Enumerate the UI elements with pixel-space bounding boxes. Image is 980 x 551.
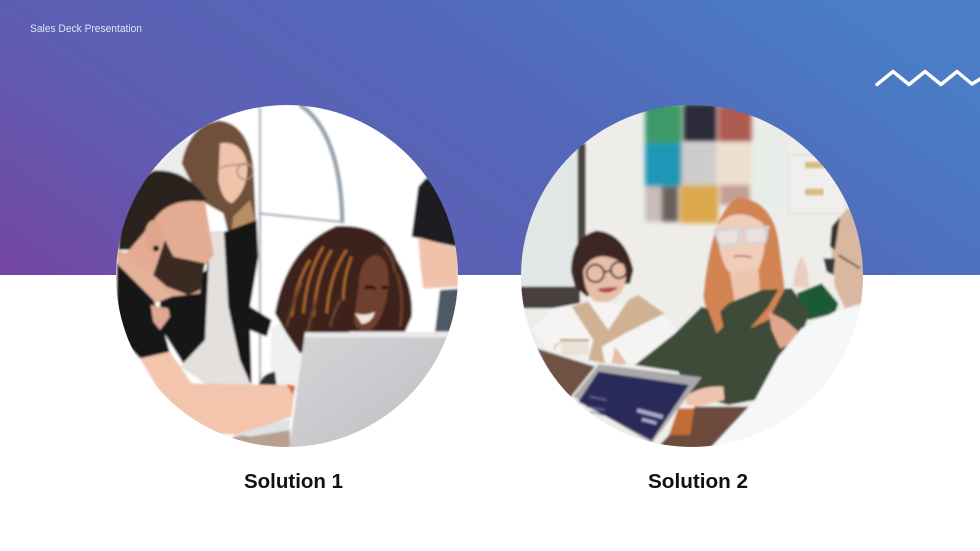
front tablet	[573, 357, 702, 443]
vase and plant	[793, 257, 838, 320]
icon: zigzag decoration	[877, 72, 980, 84]
man	[117, 171, 295, 435]
right person	[412, 177, 463, 332]
laptop	[288, 330, 448, 447]
forearm	[685, 386, 724, 407]
back laptop	[537, 348, 595, 400]
photo: colleagues at meeting table	[521, 105, 863, 447]
standing woman	[160, 121, 272, 387]
table	[659, 405, 749, 447]
poster	[645, 103, 752, 223]
heading: Solution 1: Solution 1	[244, 470, 343, 493]
terracotta pot	[669, 408, 694, 435]
deck title: Sales Deck Presentation	[30, 23, 142, 35]
window	[521, 142, 588, 310]
heading: Solution 2: Solution 2	[648, 470, 748, 493]
coffee cup	[555, 340, 589, 355]
curly hair woman	[258, 226, 412, 393]
table and keyboard	[232, 418, 292, 447]
wall cards	[788, 156, 825, 196]
right woman	[635, 198, 810, 405]
gradient header band	[0, 0, 980, 275]
left woman	[532, 231, 678, 363]
photo: team around laptop	[116, 105, 458, 447]
man foreground	[710, 208, 863, 446]
